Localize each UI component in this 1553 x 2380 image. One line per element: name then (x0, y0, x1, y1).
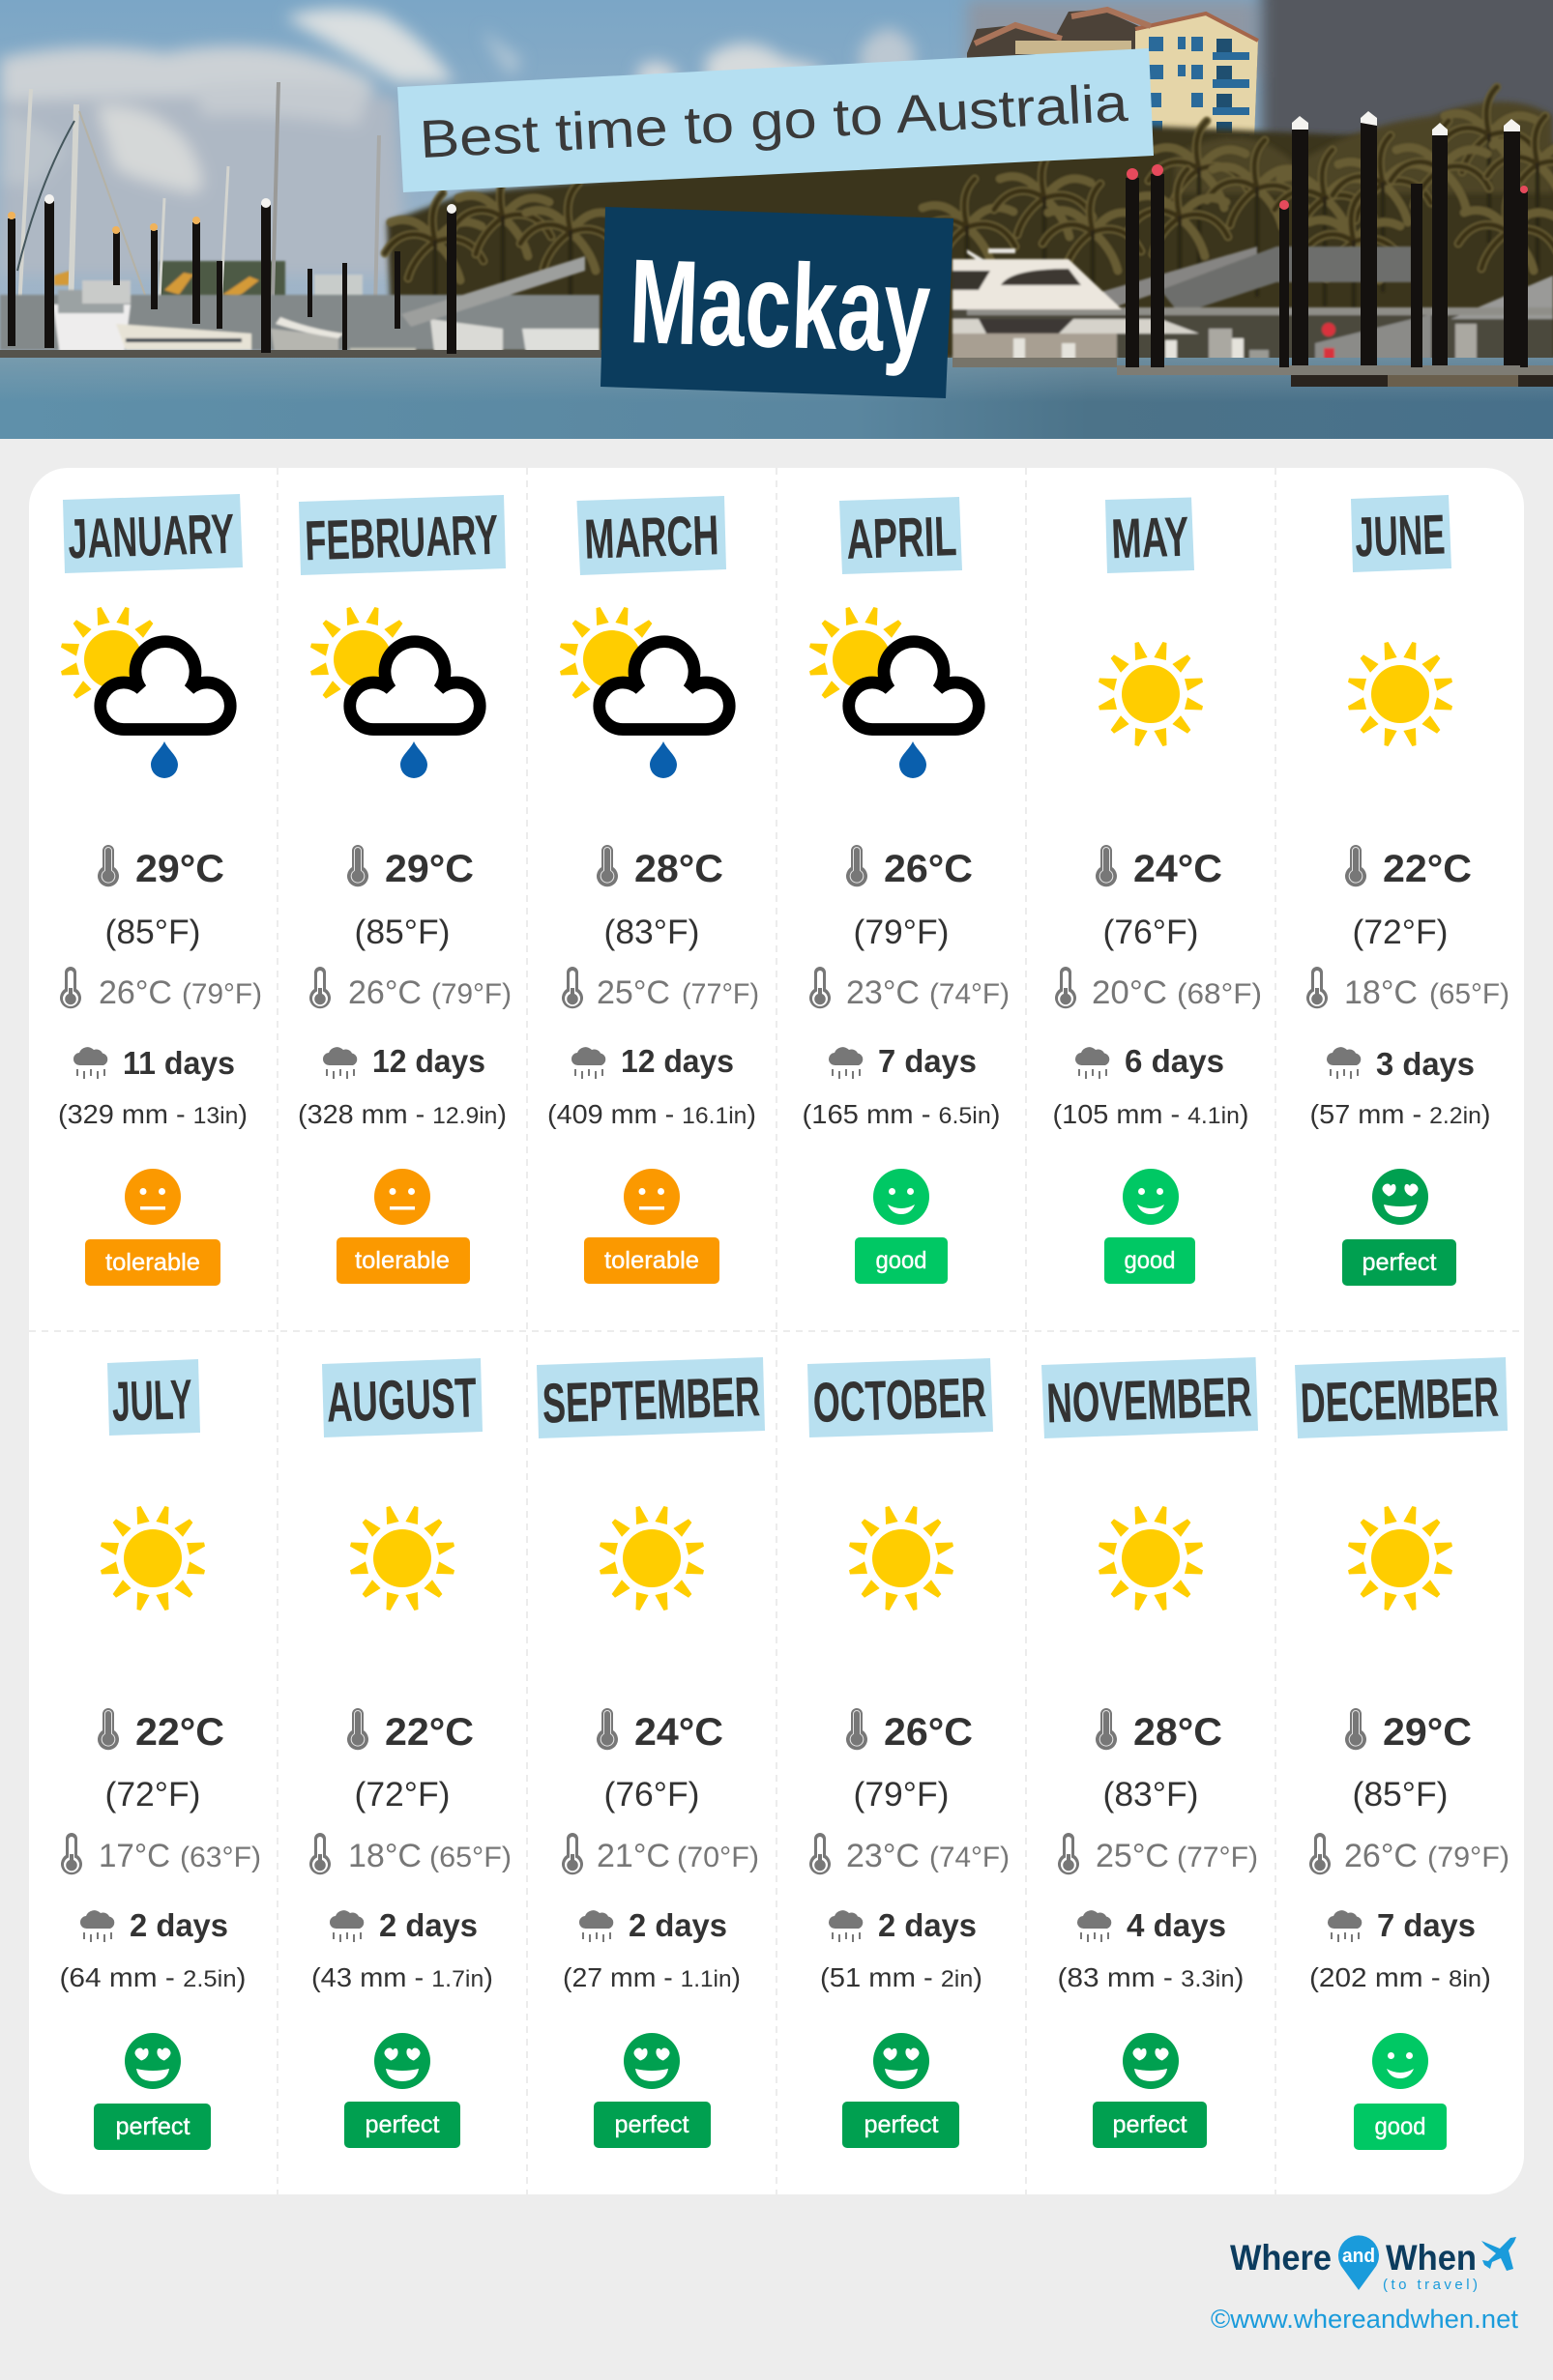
left boats (0, 256, 600, 360)
high temperature (1345, 845, 1472, 951)
icon: sun (1348, 642, 1452, 746)
city name banner (601, 207, 953, 398)
heading: January: JANUARY (67, 503, 235, 570)
low temperature (309, 967, 512, 1011)
rain days (1075, 1043, 1224, 1079)
high temperature (347, 1708, 474, 1814)
low temperature (562, 967, 759, 1011)
high temperature: 24°C (634, 1711, 723, 1754)
low temperature: 20°C (1092, 974, 1167, 1011)
panel: March (547, 496, 759, 1284)
low temperature: (79°F) (431, 978, 512, 1010)
low temperature: 26°C (1344, 1838, 1418, 1874)
high temperature: 24°C (1133, 848, 1222, 890)
calendar card (29, 468, 1524, 2194)
high temperature: 29°C (1383, 1711, 1472, 1754)
logo: Where and When (1230, 2235, 1516, 2293)
high temperature (98, 845, 224, 951)
low temperature: (63°F) (180, 1842, 261, 1873)
rainfall amount: (328 mm - 12.9in) (298, 1099, 507, 1129)
high temperature: (72°F) (104, 1776, 201, 1814)
title banner: Best time to go to Australia (418, 73, 1129, 169)
low temperature: 26°C (348, 974, 422, 1011)
high temperature: 29°C (385, 848, 474, 890)
icon: sun (849, 1506, 953, 1611)
icon: sun, cloud and rain drop (310, 607, 480, 778)
low temperature: 25°C (597, 974, 670, 1011)
heading: March: MARCH (583, 504, 719, 571)
rainfall amount: (64 mm - 2.5in) (60, 1962, 246, 1992)
low temperature (60, 967, 262, 1011)
high temperature: (79°F) (853, 914, 950, 951)
water (0, 358, 1553, 439)
high temperature: 22°C (135, 1711, 224, 1754)
rainfall amount: (105 mm - 4.1in) (1052, 1099, 1249, 1129)
low temperature: (77°F) (682, 978, 759, 1010)
rain days: 3 days (1376, 1046, 1475, 1082)
low temperature: 23°C (846, 1838, 920, 1874)
high temperature (347, 845, 474, 951)
rainfall amount: (329 mm - 13in) (58, 1099, 248, 1129)
high temperature: (83°F) (603, 914, 700, 951)
logo: Where and When: and (1342, 2246, 1375, 2267)
heading: August (322, 1358, 483, 1437)
rating: perfect (594, 2033, 711, 2148)
low temperature (1055, 967, 1262, 1011)
low temperature: (79°F) (182, 978, 262, 1010)
rating: perfect (842, 2033, 959, 2148)
rainfall amount: (57 mm - 2.2in) (1309, 1099, 1491, 1129)
low temperature (809, 1833, 1010, 1874)
heading: July: JULY (111, 1368, 193, 1434)
high temperature: (76°F) (1102, 914, 1199, 951)
high temperature: 26°C (884, 848, 973, 890)
heading: April (839, 497, 962, 574)
rating: tolerable: tolerable (355, 1247, 450, 1274)
rating: perfect (1093, 2033, 1207, 2148)
rain days (829, 1907, 977, 1943)
heading: March (576, 496, 726, 575)
rating: good: good (1375, 2113, 1425, 2140)
low temperature (1306, 967, 1509, 1011)
low temperature: 18°C (348, 1838, 422, 1874)
rating: perfect (344, 2033, 460, 2148)
rain days (80, 1907, 228, 1943)
high temperature: (85°F) (104, 914, 201, 951)
high temperature: (85°F) (354, 914, 451, 951)
icon: sun, cloud and rain drop (61, 607, 230, 778)
panel: November (1041, 1357, 1258, 2148)
rating: perfect (94, 2033, 211, 2150)
heading: May: MAY (1110, 506, 1189, 570)
low temperature (562, 1833, 759, 1874)
low temperature: (79°F) (1427, 1842, 1509, 1873)
rain days (323, 1043, 485, 1079)
rating: tolerable: tolerable (604, 1247, 699, 1274)
heading: August: AUGUST (326, 1366, 478, 1435)
icon: sun, cloud and rain drop (809, 607, 979, 778)
high temperature: (72°F) (354, 1776, 451, 1814)
panel: June (1306, 495, 1509, 1286)
photo: Mackay marina (0, 0, 1553, 439)
low temperature: (70°F) (677, 1842, 759, 1873)
rating: good (1104, 1169, 1195, 1284)
heading: July (107, 1359, 200, 1436)
high temperature (597, 845, 723, 951)
rain days (1327, 1046, 1475, 1082)
rain days: 12 days (621, 1043, 734, 1079)
low temperature: (77°F) (1177, 1842, 1258, 1873)
icon: sun (350, 1506, 454, 1611)
rating: perfect: perfect (116, 2113, 190, 2140)
high temperature: (85°F) (1352, 1776, 1449, 1814)
high temperature: (76°F) (603, 1776, 700, 1814)
rain days (579, 1907, 727, 1943)
rain days: 2 days (130, 1907, 228, 1943)
rain days: 6 days (1125, 1043, 1224, 1079)
rain days (1077, 1907, 1226, 1943)
rain days: 7 days (1377, 1907, 1476, 1943)
high temperature: (72°F) (1352, 914, 1449, 951)
heading: June: JUNE (1354, 503, 1446, 569)
low temperature: (74°F) (929, 978, 1010, 1010)
low temperature: 25°C (1096, 1838, 1169, 1874)
rating: tolerable (85, 1169, 220, 1286)
rainfall amount: (165 mm - 6.5in) (803, 1099, 1000, 1129)
rating: perfect: perfect (864, 2111, 939, 2138)
heading: February: FEBRUARY (304, 504, 499, 572)
low temperature: (65°F) (1429, 978, 1509, 1010)
rating: good (1354, 2033, 1447, 2150)
rainfall amount: (51 mm - 2in) (820, 1962, 982, 1992)
rating: good: good (1124, 1247, 1176, 1274)
high temperature: 28°C (1133, 1711, 1222, 1754)
rain days (73, 1045, 235, 1081)
title banner (397, 48, 1154, 192)
low temperature: 21°C (597, 1838, 670, 1874)
heading: June (1351, 495, 1451, 572)
low temperature: 26°C (99, 974, 172, 1011)
rating: tolerable (584, 1169, 719, 1284)
rain days: 11 days (123, 1045, 235, 1081)
rainfall amount: (409 mm - 16.1in) (547, 1099, 756, 1129)
panel: August (309, 1358, 512, 2148)
right marina: ramps, white boat, dock (952, 247, 1553, 369)
rain days (330, 1907, 478, 1943)
heading: January (63, 494, 243, 573)
icon: sun (1099, 1506, 1203, 1611)
high temperature: (79°F) (853, 1776, 950, 1814)
high temperature (1345, 1708, 1472, 1814)
rating: good (855, 1169, 948, 1284)
low temperature (809, 967, 1010, 1011)
rating: perfect: perfect (1112, 2111, 1187, 2138)
high temperature: (83°F) (1102, 1776, 1199, 1814)
logo: Where and When: When (1386, 2238, 1477, 2278)
city name banner: Mackay (628, 235, 932, 378)
rating: perfect (1342, 1169, 1456, 1286)
low temperature (309, 1833, 512, 1874)
logo: Where and When: Where (1230, 2238, 1332, 2278)
icon: sun, cloud and rain drop (560, 607, 729, 778)
panel: January (58, 494, 262, 1286)
rating: perfect: perfect (615, 2111, 689, 2138)
high temperature (1096, 845, 1222, 951)
high temperature (98, 1708, 224, 1814)
heading: September: SEPTEMBER (542, 1365, 761, 1436)
icon: sun (1348, 1506, 1452, 1611)
low temperature (1058, 1833, 1258, 1874)
icon: sun (101, 1506, 205, 1611)
heading: February (299, 495, 506, 575)
high temperature: 28°C (634, 848, 723, 890)
icon: sun (600, 1506, 704, 1611)
rating: perfect: perfect (366, 2111, 440, 2138)
rainfall amount: (83 mm - 3.3in) (1058, 1962, 1244, 1992)
rain days (571, 1043, 734, 1079)
copyright url: ©www.whereandwhen.net (1211, 2305, 1518, 2334)
high temperature (846, 1708, 973, 1814)
rain days: 2 days (878, 1907, 977, 1943)
distant trees and diggers (54, 261, 363, 304)
heading: November: NOVEMBER (1045, 1366, 1252, 1436)
panel: February (298, 495, 512, 1284)
rain days: 4 days (1127, 1907, 1226, 1943)
high temperature (1096, 1708, 1222, 1814)
high temperature: 22°C (385, 1711, 474, 1754)
low temperature: 18°C (1344, 974, 1418, 1011)
low temperature: (74°F) (929, 1842, 1010, 1873)
rainfall amount: (43 mm - 1.7in) (311, 1962, 493, 1992)
rainfall amount: (27 mm - 1.1in) (563, 1962, 741, 1992)
low temperature (1309, 1833, 1509, 1874)
low temperature: 17°C (99, 1838, 170, 1874)
rainfall amount: (202 mm - 8in) (1309, 1962, 1491, 1992)
panel: September (537, 1357, 765, 2148)
low temperature (61, 1833, 261, 1874)
rain days: 12 days (372, 1043, 485, 1079)
heading: November (1041, 1357, 1258, 1438)
heading: May (1105, 497, 1194, 573)
panel: December (1295, 1357, 1509, 2150)
heading: October (807, 1358, 993, 1437)
rain days (829, 1043, 977, 1079)
rating: tolerable (337, 1169, 470, 1284)
rain days: 2 days (629, 1907, 727, 1943)
panel: May (1052, 497, 1262, 1284)
rating: good: good (876, 1247, 926, 1274)
high temperature: 29°C (135, 848, 224, 890)
icon: sun (1099, 642, 1203, 746)
high temperature: 22°C (1383, 848, 1472, 890)
rain days (1328, 1907, 1476, 1943)
rating: tolerable: tolerable (105, 1249, 200, 1276)
masts (17, 82, 379, 309)
low temperature: 23°C (846, 974, 920, 1011)
panel: October (807, 1358, 1010, 2148)
high temperature (597, 1708, 723, 1814)
low temperature: (68°F) (1177, 978, 1262, 1010)
panel: April (803, 497, 1010, 1284)
high temperature (846, 845, 973, 951)
rain days: 2 days (379, 1907, 478, 1943)
rain days: 7 days (878, 1043, 977, 1079)
logo: Where and When: (to travel) (1383, 2277, 1478, 2293)
heading: April: APRIL (845, 505, 957, 571)
low temperature: (65°F) (429, 1842, 512, 1873)
high temperature: 26°C (884, 1711, 973, 1754)
rating: perfect: perfect (1362, 1249, 1437, 1276)
heading: October: OCTOBER (812, 1366, 987, 1435)
heading: September (537, 1357, 765, 1438)
panel: July (60, 1359, 261, 2150)
